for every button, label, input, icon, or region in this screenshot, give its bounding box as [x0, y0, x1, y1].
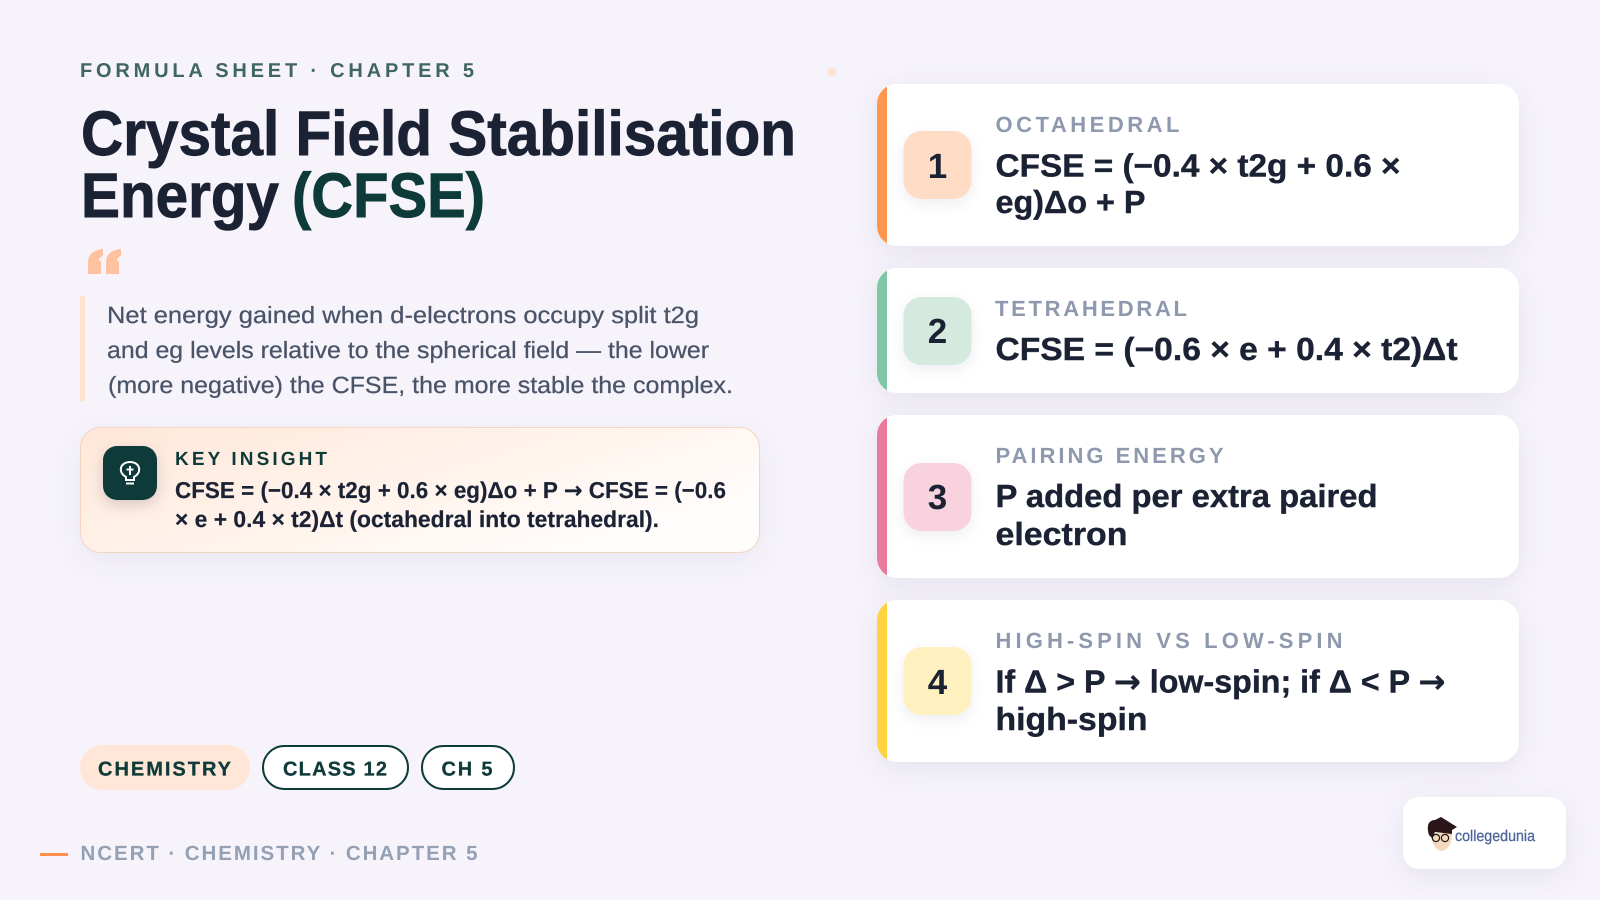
panel: key insight: CFSE = (−0.4 × t2g + 0.6 × eg)Δo + P → CFSE = (−0.6 — [175, 477, 726, 504]
definition block: and eg levels relative to the spherical field — the lower — [107, 337, 709, 363]
icon: quote mark — [88, 249, 121, 274]
badge 3: 3 — [928, 478, 947, 517]
definition block: Net energy gained when d-electrons occupy split t2g — [107, 302, 699, 328]
logo card: collegedunia: collegedunia — [1455, 828, 1535, 845]
panel: step 4 high-spin vs low-spin — [877, 600, 1519, 762]
definition block: (more negative) the CFSE, the more stable the complex. — [108, 372, 733, 398]
chip: chemistry — [80, 745, 250, 790]
icon: light bulb — [103, 446, 157, 500]
icon: student face — [1428, 817, 1457, 851]
eyebrow: formula sheet chapter: FORMULA SHEET · CHAPTER 5 — [80, 60, 474, 82]
panel: step 4 high-spin vs low-spin: high-spin — [996, 701, 1148, 737]
panel: step 1 octahedral: eg)Δo + P — [996, 184, 1146, 220]
title — [81, 99, 796, 231]
chip: ch 5 — [422, 746, 514, 789]
badge 2 — [904, 297, 972, 365]
title: (CFSE) — [292, 161, 485, 231]
logo card: collegedunia — [1403, 797, 1566, 869]
chip: chemistry: CHEMISTRY — [98, 758, 232, 780]
panel: key insight — [80, 428, 760, 552]
decorative dot — [828, 68, 836, 76]
footer source line: NCERT · CHEMISTRY · CHAPTER 5 — [80, 842, 478, 865]
badge 4: 4 — [928, 663, 948, 702]
panel: step 3 pairing energy — [877, 415, 1519, 578]
panel: key insight: × e + 0.4 × t2)Δt (octahedral into tetrahedral). — [175, 506, 659, 532]
badge 1: 1 — [928, 147, 947, 186]
panel: step 3 pairing energy: electron — [996, 516, 1128, 552]
panel: key insight: KEY INSIGHT — [175, 449, 327, 470]
panel: step 4 high-spin vs low-spin: If Δ > P → low-spin; if Δ < P → — [996, 662, 1446, 700]
title: Energy — [81, 161, 279, 231]
badge 3 — [904, 463, 972, 531]
panel: step 3 pairing energy: PAIRING ENERGY — [996, 443, 1224, 468]
panel: step 1 octahedral: CFSE = (−0.4 × t2g + 0.6 × — [996, 148, 1400, 184]
chip: class 12: CLASS 12 — [283, 758, 387, 780]
panel: step 1 octahedral — [877, 84, 1519, 246]
definition block — [80, 296, 733, 401]
panel: step 4 high-spin vs low-spin: HIGH-SPIN VS LOW-SPIN — [996, 628, 1342, 653]
badge 4 — [904, 647, 972, 715]
chip: class 12 — [263, 746, 408, 789]
badge 2: 2 — [928, 312, 947, 351]
panel: step 2 tetrahedral: CFSE = (−0.6 × e + 0.4 × t2)Δt — [996, 331, 1458, 367]
panel: step 1 octahedral: OCTAHEDRAL — [996, 112, 1180, 137]
chip: ch 5: CH 5 — [442, 758, 492, 780]
panel: step 3 pairing energy: P added per extra paired — [996, 478, 1378, 514]
panel: step 2 tetrahedral: TETRAHEDRAL — [995, 296, 1187, 321]
panel: step 2 tetrahedral — [877, 268, 1519, 393]
badge 1 — [904, 131, 972, 199]
title: Crystal Field Stabilisation — [81, 99, 796, 169]
